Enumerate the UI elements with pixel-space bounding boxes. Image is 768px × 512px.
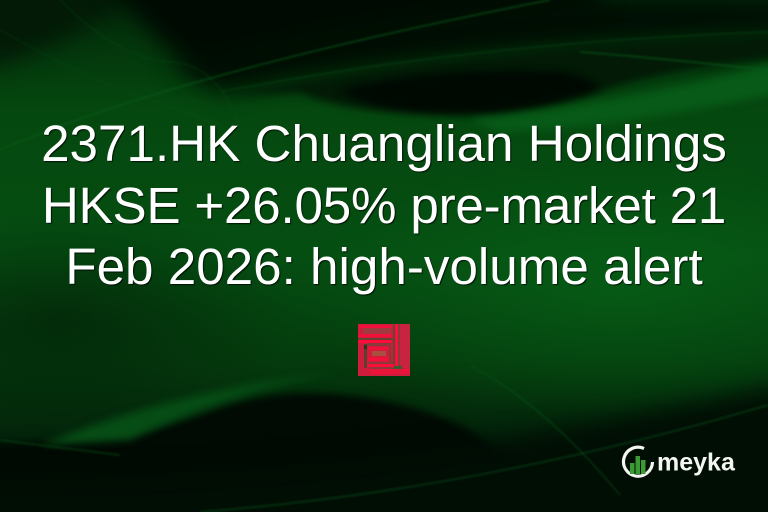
title: 2371.HK Chuanglian Holdings [41, 115, 727, 172]
title: Feb 2026: high-volume alert [65, 238, 703, 295]
icon: logo ring with bars [624, 447, 652, 476]
icon: company emblem [358, 324, 410, 376]
title [41, 115, 727, 296]
logo: meyka [622, 446, 736, 478]
title: HKSE +26.05% pre-market 21 [42, 177, 726, 234]
logo wordmark: meyka [657, 448, 736, 476]
